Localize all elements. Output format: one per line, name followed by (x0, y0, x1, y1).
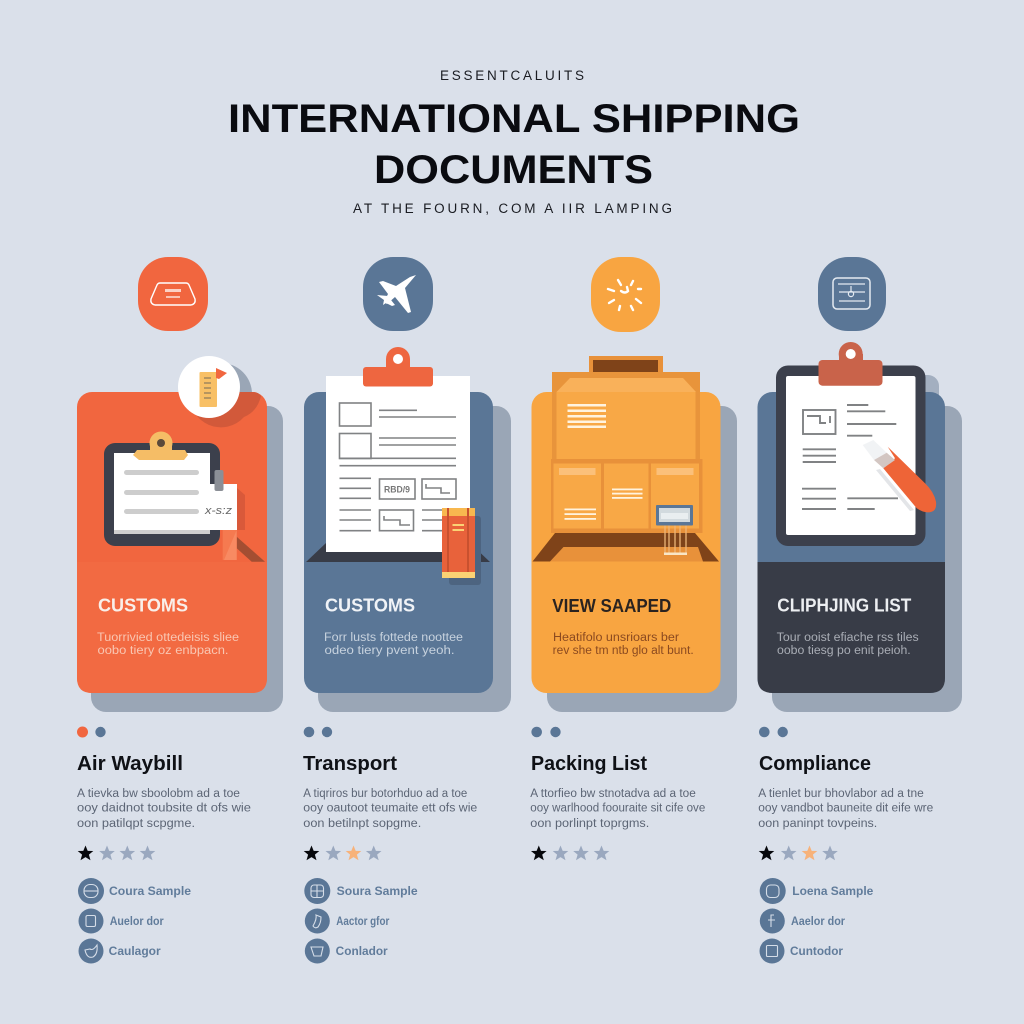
header (228, 68, 800, 216)
card description: rev she tm ntb glo alt bunt. (553, 645, 694, 657)
parcel box (551, 356, 702, 533)
card shadow (91, 406, 283, 712)
clipboard shadow (895, 375, 939, 415)
card shadow (547, 406, 737, 712)
column title: Air Waybill (77, 753, 183, 775)
star rating (531, 846, 609, 860)
card description (97, 632, 239, 657)
card body (77, 392, 267, 693)
column description: oon betilnpt sopgme. (303, 818, 421, 830)
document stand (306, 543, 490, 562)
eyebrow: ESSENTCALUITS (440, 68, 584, 83)
panel: view shipped amber (532, 356, 737, 712)
icon: sunburst (591, 257, 660, 332)
resource list: Loena Sample (792, 886, 873, 898)
card heading: CUSTOMS (98, 596, 188, 616)
card description (324, 632, 463, 657)
sticky note (200, 470, 245, 530)
card description: Tour ooist efiache rss tiles (777, 632, 919, 644)
resource list: Auelor dor (110, 916, 164, 928)
resource list: Cuntodor (790, 946, 844, 958)
column description: oon patilqpt scpgme. (77, 818, 195, 830)
title (228, 97, 800, 192)
panel: customs blue (304, 347, 511, 712)
star rating (759, 846, 838, 860)
sticky note: x-s:z (204, 505, 233, 517)
resource list (304, 878, 418, 964)
column title: Transport (303, 753, 397, 775)
clipboard (104, 432, 220, 546)
pen (863, 440, 936, 512)
column description: ooy vandbot bauneite dit eife wre (758, 802, 933, 814)
card heading: CLIPHJING LIST (777, 596, 911, 616)
card description: oobo tiery oz enbpacn. (98, 645, 228, 657)
column description: oon paninpt tovpeins. (758, 818, 877, 830)
resource list: Aaelor dor (791, 916, 845, 928)
column description (758, 788, 933, 830)
column description: A tievka bw sboolobm ad a toe (77, 788, 240, 800)
column: air waybill (77, 726, 251, 964)
column: packing list (530, 727, 705, 860)
document: RBD/9 (384, 484, 410, 494)
column description: A ttorfieo bw stnotadva ad a toe (530, 788, 696, 800)
card shadow (318, 406, 511, 712)
document (326, 376, 470, 552)
icon: document form (818, 257, 886, 331)
subtitle: AT THE FOURN, COM A IIR LAMPING (353, 201, 672, 216)
star rating (304, 846, 382, 860)
card description: odeo tiery pvent yeoh. (324, 645, 454, 657)
card description: oobo tiesg po enit peioh. (777, 645, 911, 657)
column description: ooy daidnot toubsite dt ofs wie (77, 802, 251, 814)
card heading: CUSTOMS (325, 596, 415, 616)
column: transport (303, 727, 477, 964)
clip (363, 347, 433, 386)
pager dots (77, 726, 106, 738)
column description (530, 788, 705, 830)
label device (656, 505, 693, 555)
card body (532, 392, 720, 693)
column description: ooy warlhood foouraite sit cife ove (530, 802, 705, 814)
pager dots (531, 727, 561, 737)
star rating (78, 846, 155, 860)
card description: Heatifolo unsrioars ber (553, 632, 679, 644)
column title: Compliance (759, 753, 871, 775)
resource list (760, 878, 873, 964)
card heading: VIEW SAAPED (552, 596, 671, 616)
column description (77, 788, 251, 830)
card description (777, 632, 919, 657)
pager dots (759, 727, 788, 737)
resource list: Coura Sample (109, 886, 191, 898)
card description: Tuorrivied ottedeisis sliee (97, 632, 239, 644)
book (442, 508, 481, 585)
resource list: Soura Sample (337, 886, 418, 898)
card shadow (772, 406, 962, 712)
column description (303, 788, 477, 830)
icon: ruler flag badge (178, 356, 240, 418)
icon: airplane (363, 257, 433, 331)
column description: oon porlinpt toprgms. (530, 818, 649, 830)
column title: Packing List (531, 753, 647, 775)
card description (553, 632, 694, 657)
resource list: Conlador (336, 946, 388, 958)
resource list (78, 878, 191, 964)
column description: A tienlet bur bhovlabor ad a tne (758, 788, 924, 800)
column: compliance (758, 727, 933, 964)
pager dots (304, 727, 332, 737)
title: DOCUMENTS (374, 148, 653, 192)
resource list: Caulagor (109, 946, 161, 958)
badge shadow (190, 363, 252, 425)
panel: customs orange (77, 356, 283, 712)
parcel base (532, 533, 719, 562)
resource list: Aactor gfor (336, 916, 390, 928)
card description: Forr lusts fottede noottee (324, 632, 463, 644)
title: INTERNATIONAL SHIPPING (228, 97, 800, 141)
clipboard (776, 342, 926, 546)
column description: A tiqriros bur botorhduo ad a toe (303, 788, 467, 800)
icon: customs badge (138, 257, 208, 331)
panel: clipping list dark (758, 342, 962, 712)
column description: ooy oautoot teumaite ett ofs wie (303, 802, 477, 814)
ribbon (223, 530, 265, 562)
card body (304, 392, 493, 693)
card body (758, 392, 945, 693)
